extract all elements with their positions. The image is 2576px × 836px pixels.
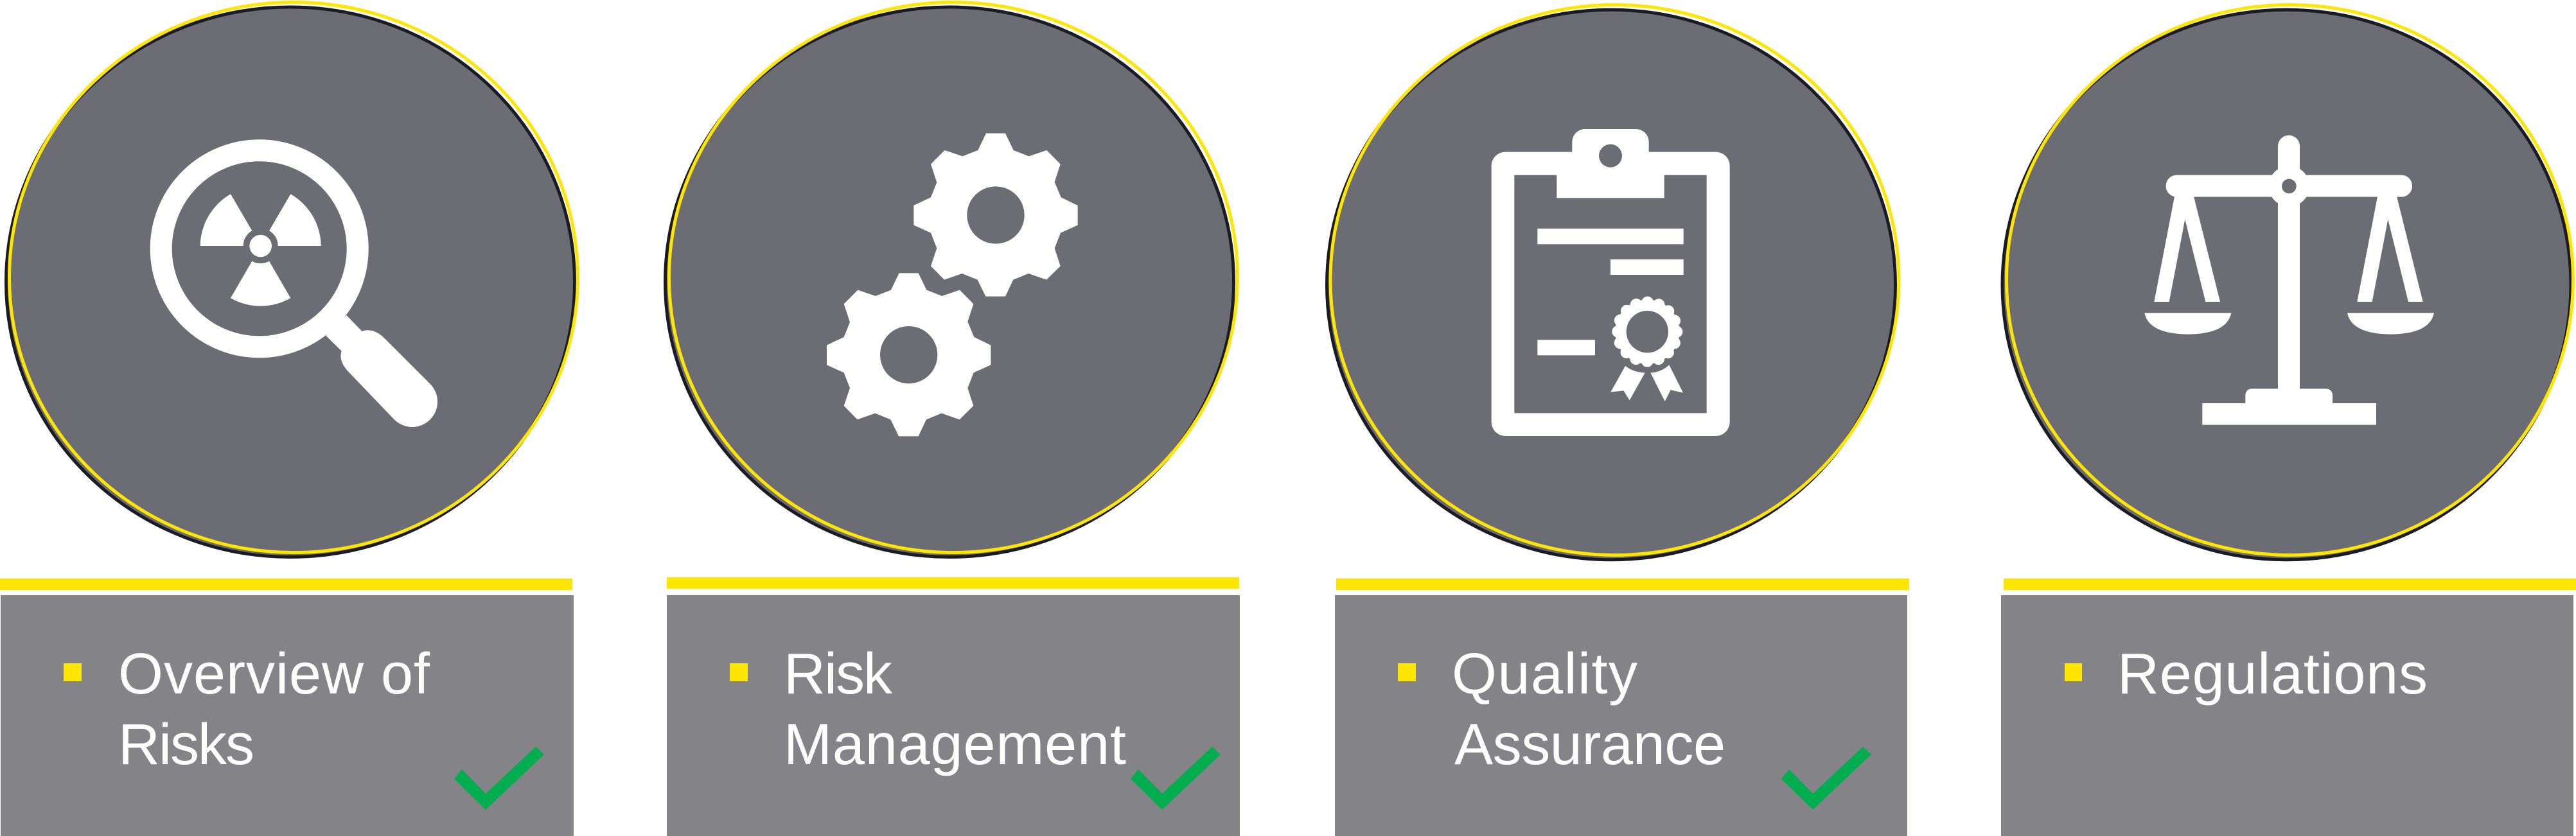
- panel: regulations: [2001, 5, 2576, 836]
- document lines: [1537, 229, 1684, 355]
- label box: [2001, 595, 2573, 836]
- yellow rule: [667, 577, 1239, 589]
- panel: risk management: [666, 3, 1240, 836]
- label text: Regulations: [2117, 642, 2428, 706]
- yellow rule: [0, 579, 572, 590]
- bullet: [730, 663, 748, 681]
- gear: lower: [827, 273, 991, 436]
- panel: overview of risks: [0, 3, 578, 836]
- label text: Management: [784, 713, 1126, 777]
- icon: gears: [827, 134, 1078, 436]
- label text: [118, 642, 430, 777]
- circle: regulations: [2002, 5, 2573, 560]
- label text: Risk: [784, 642, 893, 706]
- check mark: [1131, 747, 1221, 810]
- bullet: [2065, 663, 2082, 681]
- circle: overview of risks: [6, 3, 578, 557]
- yellow rule: [2004, 579, 2576, 590]
- circle: quality assurance: [1327, 5, 1899, 560]
- bullet: [1398, 663, 1416, 681]
- label box: [1335, 595, 1907, 836]
- label box: [667, 595, 1240, 836]
- icon: balance scales: [2144, 135, 2434, 425]
- bullet: [64, 663, 82, 681]
- label text: Assurance: [1454, 713, 1725, 777]
- label text: Overview of: [118, 642, 430, 706]
- icon: clipboard with certificate seal: [1492, 129, 1730, 436]
- seal: [1610, 300, 1683, 401]
- check mark: [454, 747, 544, 810]
- gear: upper: [913, 134, 1078, 297]
- label text: [1452, 642, 1725, 777]
- yellow rule: [1336, 579, 1909, 590]
- check mark: [1781, 747, 1871, 810]
- label box: [1, 595, 574, 836]
- label text: [784, 642, 1126, 777]
- label text: Risks: [118, 713, 254, 777]
- circle: risk management: [666, 3, 1237, 557]
- icon: magnifier with radiation symbol: [161, 150, 437, 427]
- panel: quality assurance: [1327, 5, 1909, 836]
- label text: Quality: [1452, 642, 1637, 706]
